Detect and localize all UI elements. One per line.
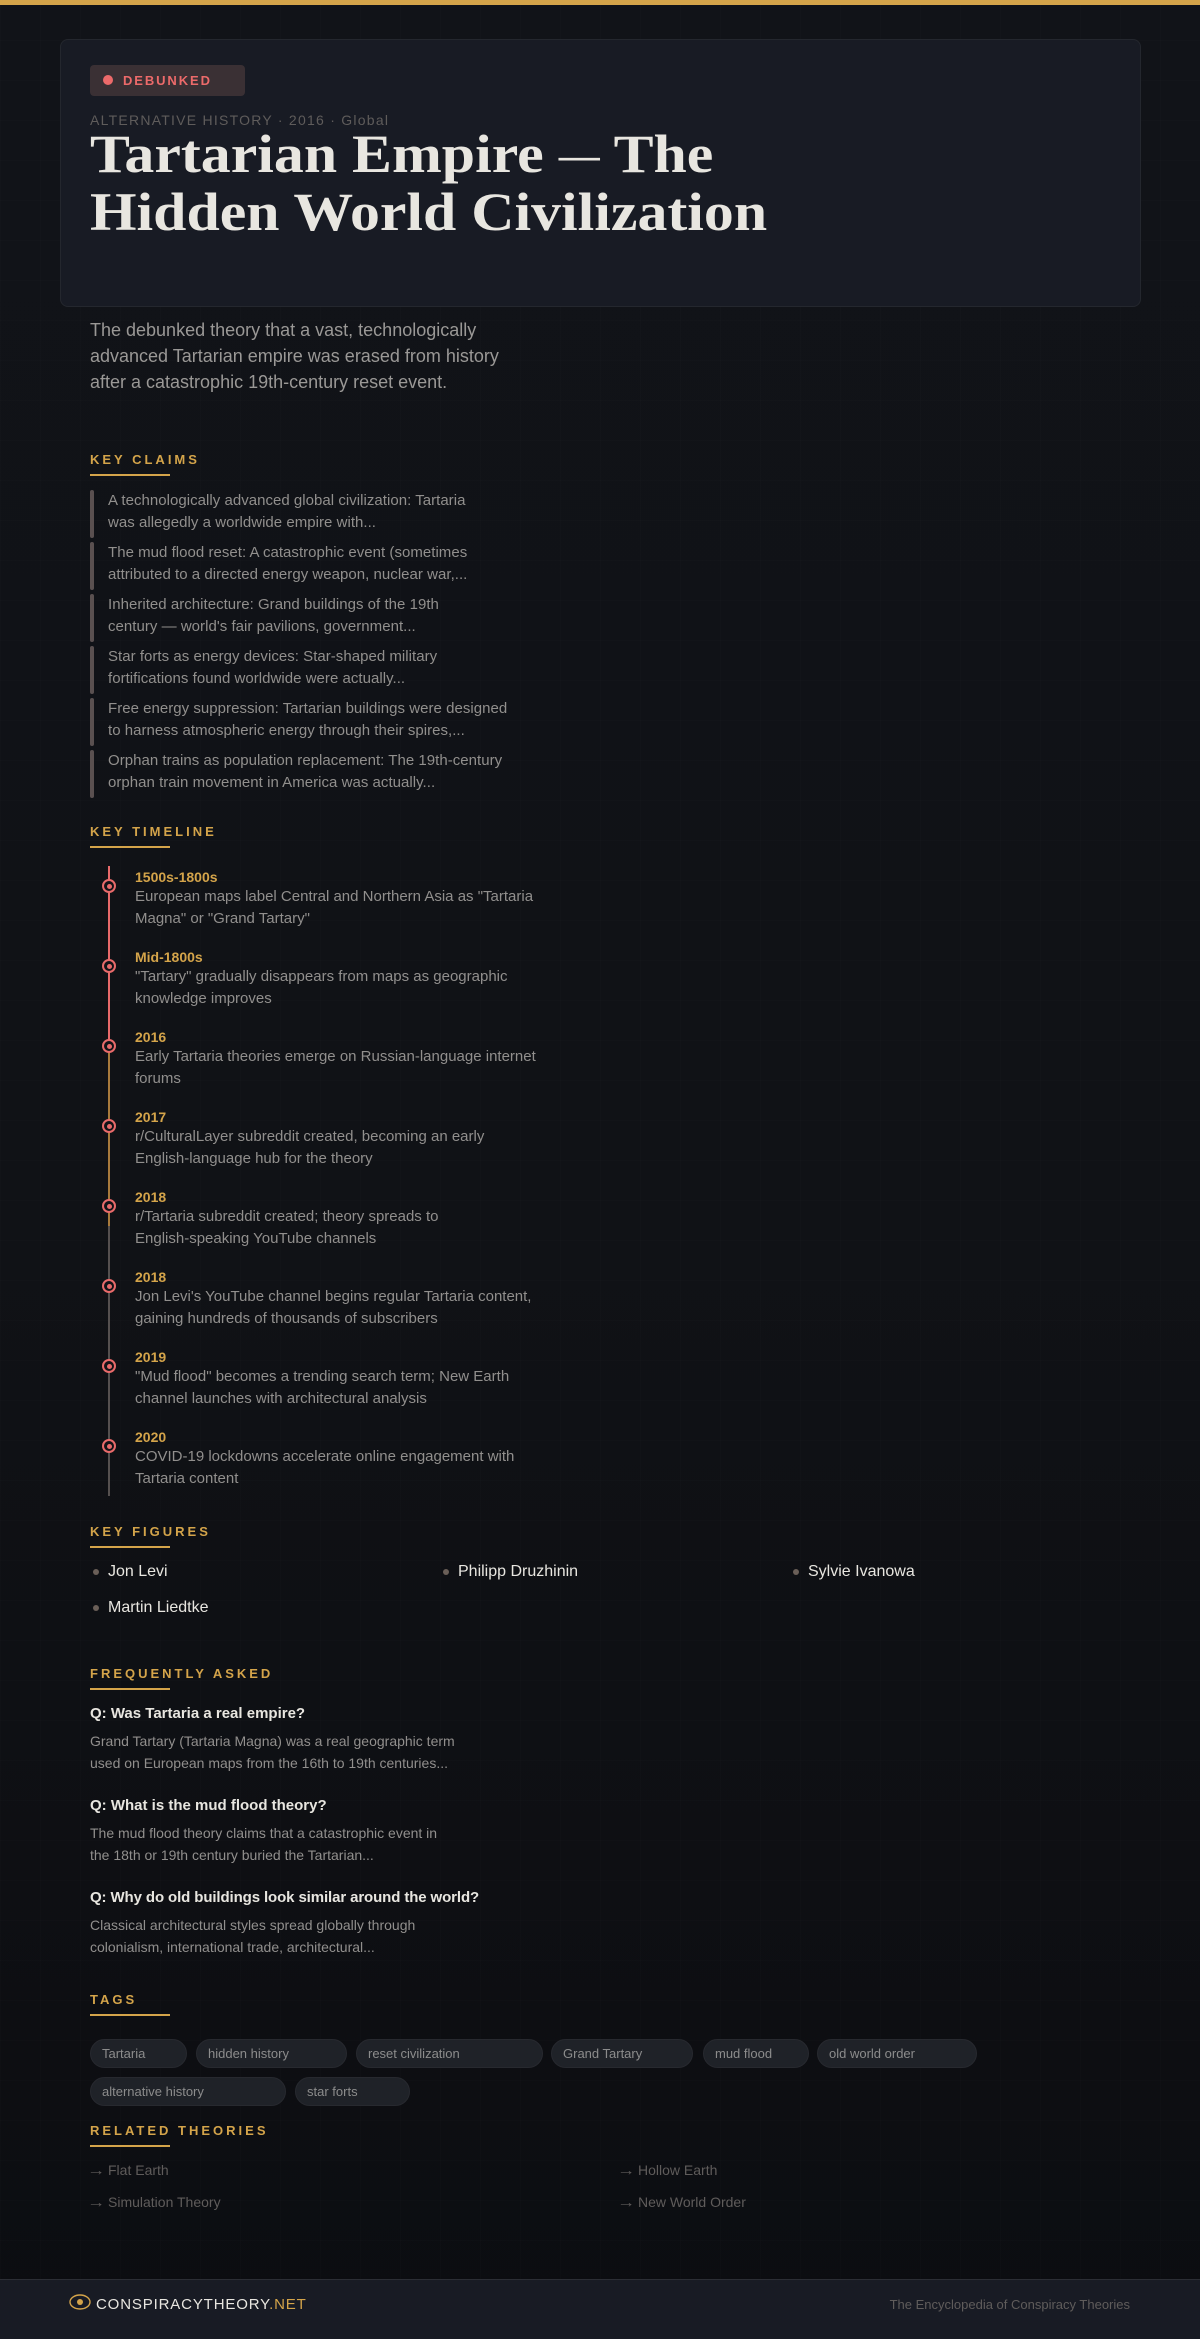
event: 2017: 2017: [135, 1109, 166, 1125]
tag: reset civilization: [356, 2039, 543, 2068]
event: 2019: [102, 1349, 509, 1407]
heading: related theories: RELATED THEORIES: [90, 2123, 268, 2138]
heading: key timeline: KEY TIMELINE: [90, 824, 217, 839]
event: 2018 subreddit: English-speaking YouTube channels: [135, 1230, 376, 1247]
event: 2018 YouTube: gaining hundreds of thousands of subscribers: [135, 1310, 438, 1327]
badge: debunked status: [90, 65, 245, 96]
tag: alternative history: alternative history: [102, 2084, 204, 2099]
event: Mid-1800s: Mid-1800s: [135, 949, 203, 965]
claim 6: orphan train movement in America was actually...: [108, 774, 435, 791]
FAQ item 3: colonialism, international trade, architectural...: [90, 1939, 375, 1955]
FAQ item 2: Q: What is the mud flood theory?: [90, 1797, 327, 1814]
claim 1: [90, 490, 466, 538]
heading: key claims: KEY CLAIMS: [90, 452, 200, 467]
tag: Tartaria: Tartaria: [102, 2046, 145, 2061]
footer: [0, 2279, 1200, 2339]
logo wordmark: CONSPIRACYTHEORY.NET: [96, 2296, 307, 2313]
claim 5: to harness atmospheric energy through their spires,...: [108, 722, 465, 739]
link: Flat Earth: Flat Earth: [108, 2162, 169, 2178]
claim 2: [90, 542, 467, 590]
title: Hidden World Civilization: [90, 182, 767, 242]
heading: tags: TAGS: [90, 1992, 137, 2007]
lede paragraph: [90, 320, 499, 392]
event: 2020: 2020: [135, 1429, 166, 1445]
tag: old world order: [817, 2039, 977, 2068]
event: 2020: Tartaria content: [135, 1470, 238, 1487]
title: [90, 124, 767, 242]
event: 2018 YouTube: [102, 1269, 531, 1327]
event: 2019: channel launches with architectural analysis: [135, 1390, 427, 1407]
claim 4: fortifications found worldwide were actually...: [108, 670, 405, 687]
heading: frequently asked: FREQUENTLY ASKED: [90, 1666, 273, 1681]
link: New World Order: →: [617, 2194, 635, 2210]
claim 3: Inherited architecture: Grand buildings of the 19th: [108, 596, 439, 613]
figure: Sylvie Ivanowa: Sylvie Ivanowa: [808, 1563, 915, 1580]
title: Tartarian Empire — The: [90, 124, 713, 184]
figure: Philipp Druzhinin: Philipp Druzhinin: [458, 1563, 578, 1580]
event: 2018 YouTube: 2018: [135, 1269, 166, 1285]
tag: hidden history: [196, 2039, 347, 2068]
top accent bar: [0, 0, 1200, 5]
panel: key claims list: [90, 490, 507, 798]
claim 1: was allegedly a worldwide empire with...: [108, 514, 376, 531]
link: Simulation Theory: →: [87, 2194, 105, 2210]
FAQ item 3: Q: Why do old buildings look similar around the world?: [90, 1889, 479, 1906]
tag: hidden history: hidden history: [208, 2046, 289, 2061]
tag: reset civilization: reset civilization: [368, 2046, 460, 2061]
event: 2017: r/CulturalLayer subreddit created, becoming an early: [135, 1128, 484, 1145]
event: Mid-1800s: knowledge improves: [135, 990, 272, 1007]
lede paragraph: after a catastrophic 19th-century reset event.: [90, 372, 447, 392]
tag: Tartaria: [90, 2039, 187, 2068]
event: 2018 subreddit: 2018: [135, 1189, 166, 1205]
heading: key figures: KEY FIGURES: [90, 1524, 211, 1539]
claim 5: [90, 698, 507, 746]
FAQ item 2: [90, 1797, 437, 1863]
event: 1500s-1800s: 1500s-1800s: [135, 869, 218, 885]
claim 6: [90, 750, 502, 798]
badge label: DEBUNKED: [123, 73, 212, 88]
icon: status dot: [103, 75, 113, 85]
event: 2017: [102, 1109, 484, 1167]
event: 2016: forums: [135, 1070, 181, 1087]
FAQ item 3: [90, 1889, 479, 1955]
event: 2016: Early Tartaria theories emerge on Russian-language internet: [135, 1048, 536, 1065]
claim 5: Free energy suppression: Tartarian buildings were designed: [108, 700, 507, 717]
tag: alternative history: [90, 2077, 286, 2106]
FAQ item 1: Grand Tartary (Tartaria Magna) was a real geographic term: [90, 1733, 455, 1749]
category and date line: ALTERNATIVE HISTORY · 2016 · Global: [90, 112, 389, 128]
event: Mid-1800s: [102, 949, 508, 1007]
claim 1: A technologically advanced global civilization: Tartaria: [108, 492, 465, 509]
tag: star forts: star forts: [307, 2084, 358, 2099]
tag: old world order: old world order: [829, 2046, 915, 2061]
timeline spine: [108, 866, 110, 1496]
link: New World Order: New World Order: [638, 2194, 746, 2210]
event: 2018 subreddit: r/Tartaria subreddit created; theory spreads to: [135, 1208, 438, 1225]
FAQ item 2: the 18th or 19th century buried the Tartarian...: [90, 1847, 374, 1863]
claim 4: Star forts as energy devices: Star-shaped military: [108, 648, 437, 665]
panel: FAQ: [90, 1705, 479, 1955]
lede paragraph: The debunked theory that a vast, technologically: [90, 320, 476, 340]
claim 6: Orphan trains as population replacement: The 19th-century: [108, 752, 502, 769]
FAQ item 1: Q: Was Tartaria a real empire?: [90, 1705, 305, 1722]
event: 2019: "Mud flood" becomes a trending search term; New Earth: [135, 1368, 509, 1385]
claim 4: [90, 646, 437, 694]
event: 2019: 2019: [135, 1349, 166, 1365]
FAQ item 1: used on European maps from the 16th to 19th centuries...: [90, 1755, 448, 1771]
icon: eye logo: [69, 2294, 91, 2310]
panel: hero header: [60, 39, 1141, 307]
claim 3: [90, 594, 439, 642]
panel: tags: [90, 2039, 977, 2106]
link: Hollow Earth: →: [617, 2162, 635, 2178]
panel: related theories: [87, 2162, 746, 2210]
event: 2018 YouTube: Jon Levi's YouTube channel begins regular Tartaria content,: [135, 1288, 531, 1305]
panel: key figures: [93, 1563, 915, 1616]
event: 1500s-1800s: [102, 869, 534, 927]
tag: star forts: [295, 2077, 410, 2106]
event: 2018 subreddit: [102, 1189, 438, 1247]
FAQ item 1: [90, 1705, 455, 1771]
event: 2020: COVID-19 lockdowns accelerate online engagement with: [135, 1448, 514, 1465]
claim 2: The mud flood reset: A catastrophic event (sometimes: [108, 544, 467, 561]
tag: mud flood: mud flood: [715, 2046, 772, 2061]
tag: Grand Tartary: [551, 2039, 693, 2068]
event: 1500s-1800s: Magna" or "Grand Tartary": [135, 910, 310, 927]
tag: mud flood: [703, 2039, 809, 2068]
event: 2017: English-language hub for the theory: [135, 1150, 373, 1167]
link: Simulation Theory: Simulation Theory: [108, 2194, 221, 2210]
chart: timeline: [102, 866, 536, 1496]
footer tagline: The Encyclopedia of Conspiracy Theories: [890, 2297, 1130, 2312]
tag: Grand Tartary: Grand Tartary: [563, 2046, 642, 2061]
event: 1500s-1800s: European maps label Central and Northern Asia as "Tartaria: [135, 888, 533, 905]
claim 2: attributed to a directed energy weapon, nuclear war,...: [108, 566, 467, 583]
figure: Martin Liedtke: Martin Liedtke: [108, 1599, 208, 1616]
FAQ item 3: Classical architectural styles spread globally through: [90, 1917, 415, 1933]
event: 2020: [102, 1429, 514, 1487]
event: 2016: [102, 1029, 536, 1087]
link: Flat Earth: →: [87, 2162, 105, 2178]
event: 2016: 2016: [135, 1029, 166, 1045]
figure: Jon Levi: Jon Levi: [108, 1563, 168, 1580]
link: Hollow Earth: Hollow Earth: [638, 2162, 717, 2178]
event: Mid-1800s: "Tartary" gradually disappears from maps as geographic: [135, 968, 508, 985]
FAQ item 2: The mud flood theory claims that a catastrophic event in: [90, 1825, 437, 1841]
lede paragraph: advanced Tartarian empire was erased from history: [90, 346, 499, 366]
claim 3: century — world's fair pavilions, government...: [108, 618, 416, 635]
